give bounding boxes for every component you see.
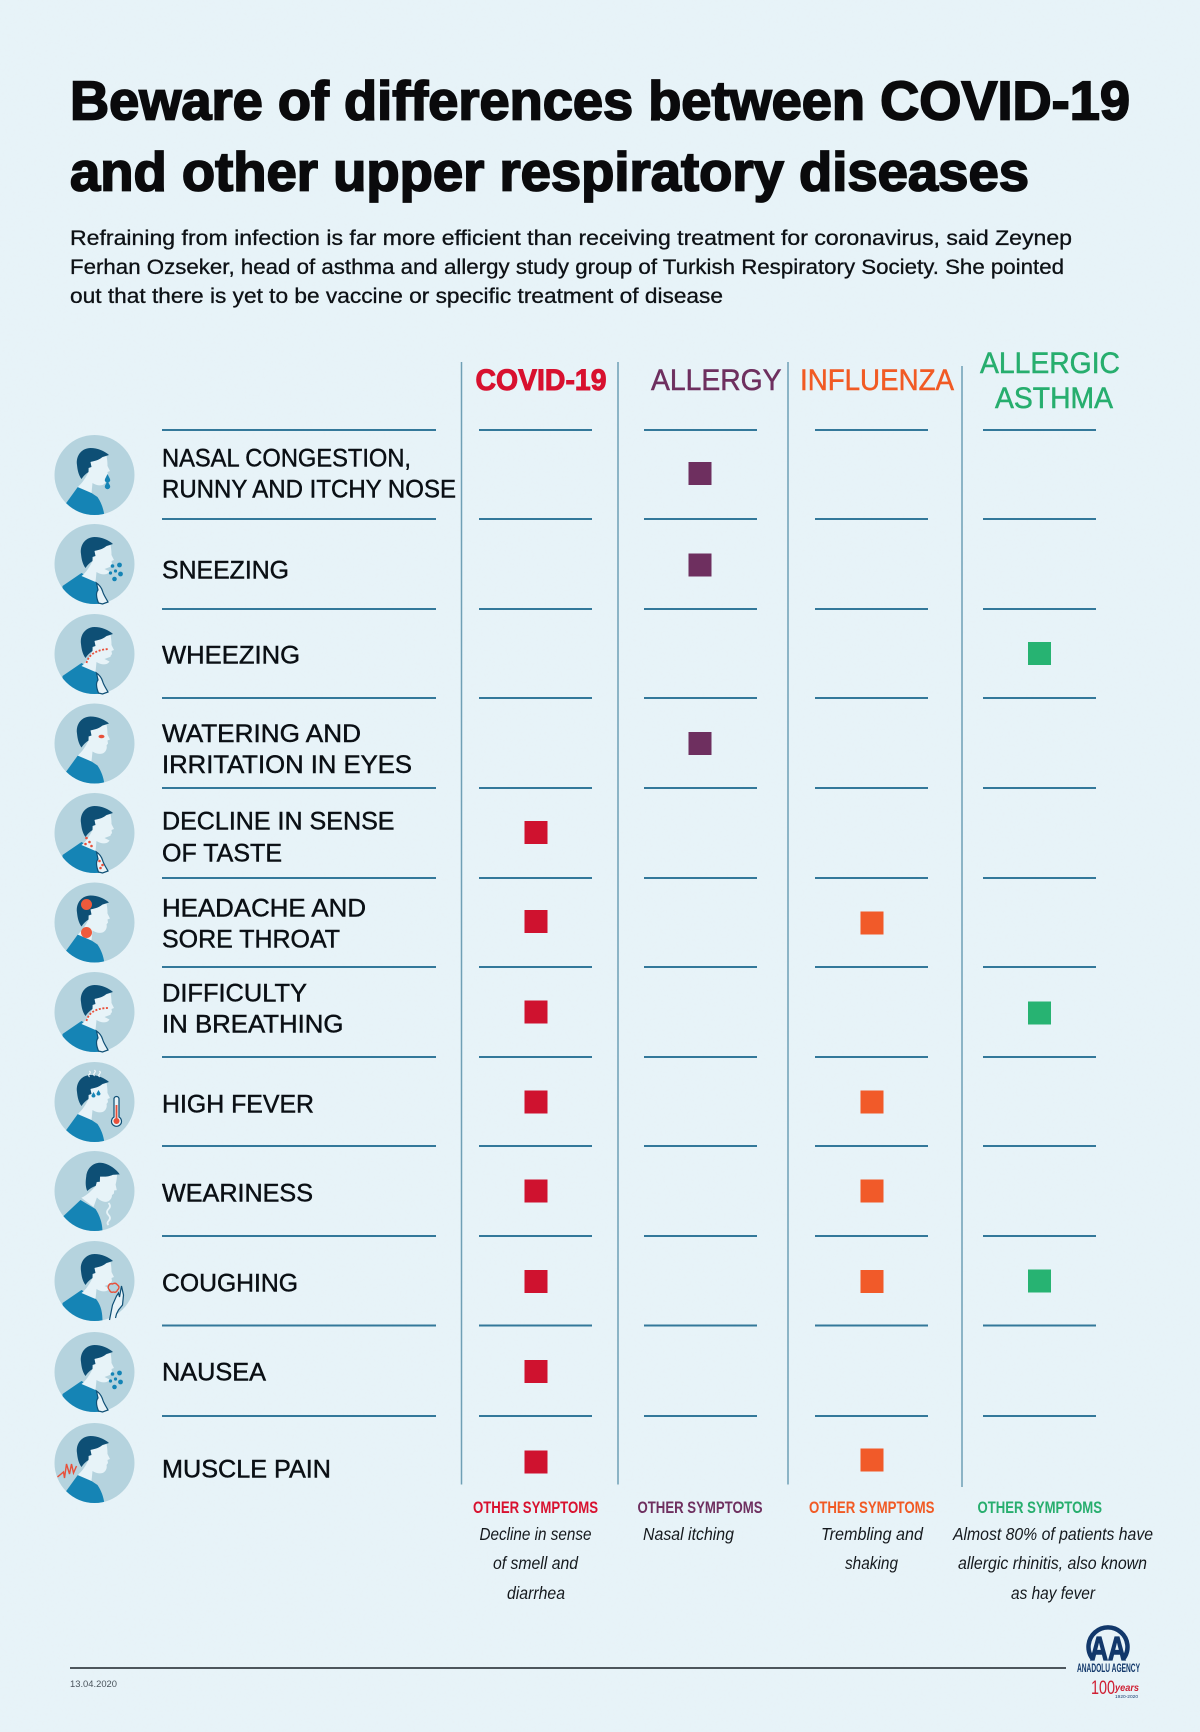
label: muscle pain: MUSCLE PAIN: [162, 1455, 331, 1483]
label: headache and sore throat: SORE THROAT: [162, 926, 340, 954]
label: difficulty in breathing: IN BREATHING: [162, 1010, 344, 1038]
logo: Anadolu Agency: 1920-2020: [1115, 1694, 1139, 1699]
other symptoms: influenza: OTHER SYMPTOMS: [809, 1499, 934, 1517]
icon: difficulty breathing: [54, 972, 134, 1053]
other symptoms: influenza: Trembling and: [821, 1524, 924, 1544]
label: watering eyes: WATERING AND: [162, 720, 361, 748]
symptom labels: [162, 444, 456, 1483]
other symptoms: COVID-19: Decline in sense: [480, 1524, 592, 1544]
icon: high fever: [54, 1062, 134, 1143]
icon: muscle pain: [54, 1423, 134, 1504]
title: [70, 70, 1130, 202]
logo: Anadolu Agency: AA: [1090, 1630, 1126, 1667]
label: headache and sore throat: HEADACHE AND: [162, 894, 366, 922]
header: influenza: INFLUENZA: [800, 364, 954, 397]
label: headache and sore throat: [162, 894, 366, 954]
markers: allergy: [688, 462, 712, 755]
logo: Anadolu Agency: 100: [1091, 1678, 1115, 1699]
other symptoms: COVID-19: [473, 1499, 598, 1603]
logo: Anadolu Agency: years: [1114, 1683, 1139, 1694]
header: allergic asthma: ALLERGIC: [980, 347, 1120, 380]
label: decline in taste: [162, 808, 394, 868]
label: coughing: COUGHING: [162, 1269, 298, 1297]
other symptoms: influenza: [809, 1499, 934, 1573]
label: nasal congestion: RUNNY AND ITCHY NOSE: [162, 476, 456, 504]
title: and other upper respiratory diseases: [70, 140, 1029, 202]
header: COVID-19: COVID-19: [476, 364, 606, 397]
intro text: Ferhan Ozseker, head of asthma and allergy study group of Turkish Respiratory Society. She pointed: [70, 256, 1064, 279]
label: nausea: NAUSEA: [162, 1358, 266, 1386]
column headers: [476, 347, 1120, 415]
intro text: out that there is yet to be vaccine or specific treatment of disease: [70, 285, 723, 308]
label: wheezing: WHEEZING: [162, 642, 300, 670]
icon: watering eyes: [54, 704, 134, 784]
icon: headache and sore throat: [54, 882, 134, 964]
label: watering eyes: [162, 720, 412, 779]
intro text: [70, 227, 1072, 308]
header: allergic asthma: ASTHMA: [995, 382, 1113, 415]
logo: Anadolu Agency: ANADOLU AGENCY: [1077, 1663, 1140, 1675]
header: allergic asthma: [980, 347, 1120, 415]
other symptoms: allergy: OTHER SYMPTOMS: [638, 1499, 762, 1517]
label: decline in taste: OF TASTE: [162, 840, 282, 868]
label: difficulty in breathing: DIFFICULTY: [162, 980, 307, 1008]
title: Beware of differences between COVID-19: [70, 70, 1130, 132]
other symptoms: allergy: [638, 1499, 762, 1544]
icon: nausea: [54, 1332, 134, 1413]
icon: weariness: [54, 1151, 134, 1232]
other symptoms: allergic asthma: Almost 80% of patients have: [952, 1524, 1153, 1544]
icon: loss of taste: [54, 793, 134, 874]
markers: COVID-19: [524, 821, 548, 1474]
other symptoms: COVID-19: diarrhea: [507, 1583, 565, 1603]
icon: runny nose: [54, 435, 134, 516]
matrix markers: [524, 462, 1051, 1474]
label: watering eyes: IRRITATION IN EYES: [162, 751, 412, 779]
date: 13.04.2020: [70, 1679, 117, 1690]
label: weariness: WEARINESS: [162, 1179, 313, 1207]
markers: allergic asthma: [1028, 642, 1051, 1292]
icon: coughing: [54, 1241, 134, 1322]
other symptoms: allergic asthma: OTHER SYMPTOMS: [978, 1499, 1102, 1517]
other symptoms: COVID-19: of smell and: [493, 1553, 579, 1573]
label: nasal congestion: [162, 444, 456, 504]
label: nasal congestion: NASAL CONGESTION,: [162, 444, 411, 472]
other symptoms: allergic asthma: allergic rhinitis, also known: [958, 1553, 1147, 1573]
label: high fever: HIGH FEVER: [162, 1090, 314, 1118]
markers: influenza: [860, 912, 884, 1472]
label: decline in taste: DECLINE IN SENSE: [162, 808, 394, 836]
other symptoms: allergy: Nasal itching: [643, 1524, 734, 1544]
icon: wheezing: [54, 614, 134, 695]
icon: sneezing: [54, 524, 134, 605]
symptom icons: [54, 435, 134, 1504]
label: difficulty in breathing: [162, 980, 344, 1038]
intro text: Refraining from infection is far more efficient than receiving treatment for coronavirus, said Zeynep: [70, 227, 1072, 250]
other symptoms: allergic asthma: [952, 1499, 1153, 1603]
other symptoms: COVID-19: OTHER SYMPTOMS: [473, 1499, 598, 1517]
other symptoms: influenza: shaking: [845, 1553, 898, 1573]
label: sneezing: SNEEZING: [162, 556, 289, 584]
logo: Anadolu Agency: [1077, 1627, 1140, 1699]
header: allergy: ALLERGY: [651, 364, 782, 397]
other symptoms: allergic asthma: as hay fever: [1011, 1583, 1096, 1603]
